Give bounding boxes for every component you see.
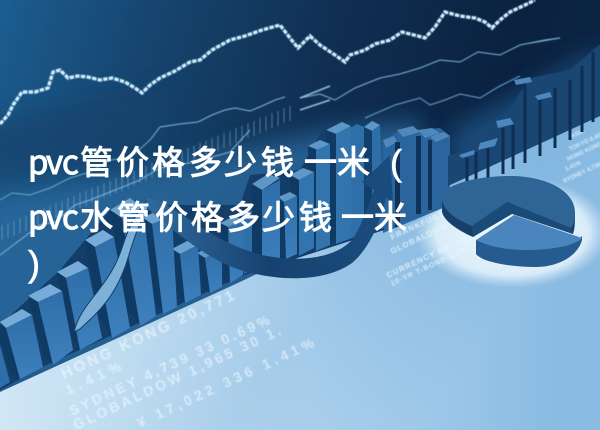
title line 2: pvc水管价格多少钱一米 [28, 191, 407, 239]
bar 3 [28, 284, 73, 365]
floor data text: right: GLOBALDOW [389, 221, 449, 256]
floor data text: lower: HONG KONG 20,771 [59, 286, 240, 383]
bar 13 [308, 140, 330, 251]
glow around pie chart [414, 176, 600, 288]
title text [28, 136, 407, 284]
floor data text: right: CURRENCY RATES [385, 234, 469, 280]
floor data text: right: 1.41% [564, 160, 583, 173]
line chart: bright candlestick trend [0, 0, 560, 255]
floor data text: lower: ¥ 17,022 336 1.41% [135, 333, 320, 430]
bar 16 [364, 121, 384, 232]
bar F [197, 245, 222, 293]
pie: main body [442, 176, 575, 237]
floor data text: lower: 1.41% [63, 356, 128, 398]
bar chart: back row of tall bars [383, 44, 600, 233]
floor data text: right: ASIA [570, 128, 586, 140]
title line 1: pvc管价格多少钱一米 [28, 136, 370, 184]
pie: separated slice [476, 215, 582, 267]
bar 1 [0, 345, 10, 388]
floor data text: right [385, 128, 600, 288]
floor data text: lower [59, 286, 320, 430]
floor data text: right: 10-YR T-BOND 3.37 [390, 247, 466, 288]
bar 14 [326, 122, 352, 244]
floor data text: lower: SYDNEY 4,739 33 0.69% [67, 310, 275, 419]
bar chart: front row of bars [0, 121, 384, 390]
arrow: thin rising ribbon [74, 198, 150, 332]
bar 11 [278, 192, 297, 262]
bar 15 [350, 124, 364, 238]
bar H [242, 210, 252, 274]
bar 12 [290, 168, 314, 256]
arrow: big curved growth arrow [147, 155, 393, 278]
bar E [172, 241, 201, 303]
pie chart [442, 176, 582, 267]
floor data text: right: FRANKFURT [389, 209, 446, 242]
floor data text: lower: GLOBALDOW 1,965 30 1. [71, 321, 286, 430]
bar A [57, 261, 102, 350]
bar 2 [0, 309, 43, 379]
bar G [220, 216, 244, 283]
bar D [143, 210, 177, 314]
bars backing [0, 122, 384, 390]
title paren line 3: ) [28, 243, 40, 284]
bar C [110, 198, 156, 326]
title paren line 1: ( [390, 142, 402, 183]
floor: light reflective surface [0, 115, 600, 430]
bar 10 [252, 174, 280, 272]
bar B [85, 230, 130, 338]
